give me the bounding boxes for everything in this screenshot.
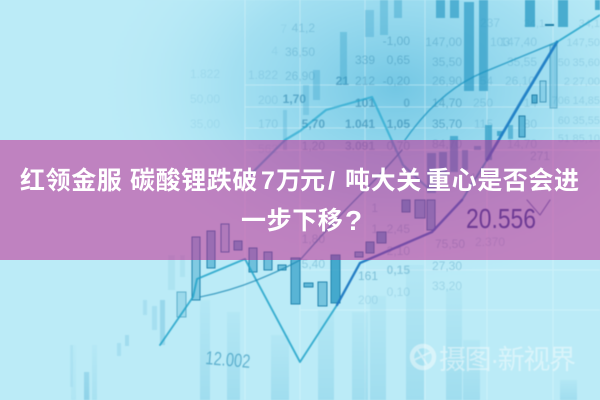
table of numbers: 26,10	[505, 74, 535, 88]
line: main rising trend	[160, 15, 600, 362]
table of numbers: 1.822	[248, 68, 278, 82]
table of numbers: 7	[280, 22, 287, 36]
table of numbers: -1,00	[383, 34, 410, 48]
table of numbers: 1.041	[345, 117, 375, 131]
title: 碳酸锂跌破	[130, 167, 258, 195]
large number 12.002: 12.002	[205, 348, 251, 373]
title: 红领金服	[20, 167, 122, 195]
title banner	[0, 140, 600, 260]
lower candlesticks	[70, 200, 435, 400]
table of numbers: 103	[490, 35, 510, 49]
table of numbers: 14,70	[432, 96, 462, 110]
title: 重心是否会进	[426, 167, 580, 195]
table of numbers: 1,05	[387, 117, 410, 131]
table of numbers: 75,50	[435, 237, 465, 251]
table of numbers: 35,55	[507, 55, 537, 69]
large number 20.556: 20.556	[466, 203, 536, 234]
faint volume bars	[71, 265, 577, 400]
table of numbers: 5,40	[302, 257, 325, 271]
table of numbers: 1	[371, 222, 378, 236]
title: 元	[300, 167, 326, 195]
table of numbers: 2	[564, 76, 570, 88]
title	[20, 167, 580, 236]
table of numbers: 10,80	[470, 171, 500, 185]
table of numbers: 147,40	[500, 35, 537, 49]
title: /	[328, 167, 336, 195]
table of numbers: 85,10	[572, 133, 600, 145]
table of numbers: 0	[403, 96, 410, 110]
table of numbers: 34,1	[524, 18, 545, 30]
table of numbers: 84,70	[432, 137, 462, 151]
table of numbers: 14,85	[572, 95, 600, 107]
table of numbers: 1,70	[283, 92, 306, 106]
table of numbers: 5	[433, 179, 440, 193]
table of numbers: 80	[524, 117, 537, 131]
table of numbers: 0,10	[387, 285, 410, 299]
table of numbers: 26,90	[285, 69, 315, 83]
table of numbers: 35,50	[432, 55, 462, 69]
table of numbers: 4	[271, 44, 278, 58]
table of numbers: 35,00	[190, 117, 220, 131]
table of numbers: 36,50	[285, 45, 315, 59]
table of numbers: 212	[355, 74, 375, 88]
table of numbers: 27,30	[432, 259, 462, 273]
watermark	[412, 345, 576, 375]
table of numbers: 101	[355, 96, 375, 110]
title: ?	[345, 205, 363, 236]
table of numbers: 2,45	[387, 222, 410, 236]
title: 万	[276, 167, 302, 195]
table of numbers: 14	[524, 96, 537, 110]
table of numbers: 14,70	[507, 137, 537, 151]
line: secondary curve	[200, 42, 557, 297]
table of numbers: 0,15	[387, 263, 410, 277]
table of numbers: 147,50	[566, 37, 600, 49]
table of numbers: 35,70	[432, 117, 462, 131]
table of numbers	[190, 16, 600, 307]
table of numbers: 115	[474, 117, 493, 131]
title: 7	[261, 167, 276, 195]
table of numbers: 237	[480, 16, 500, 30]
table of numbers: 339	[355, 53, 375, 67]
table of numbers: 1,20	[302, 139, 325, 153]
table of numbers: 0,65	[387, 53, 410, 67]
table of numbers: 200	[258, 93, 278, 107]
title: 一步下移	[241, 207, 343, 235]
table of numbers: 3.091	[345, 139, 375, 153]
title: 吨大关	[345, 167, 422, 195]
table of numbers: 26,90	[432, 74, 462, 88]
table of numbers: 161	[358, 269, 378, 283]
table of numbers: 50,00	[190, 92, 220, 106]
table of numbers: 1	[371, 201, 378, 215]
table of numbers: 706	[552, 95, 570, 107]
table of numbers: 271	[530, 149, 550, 163]
table of numbers: 34,1	[579, 18, 600, 30]
upper candlesticks	[283, 0, 600, 193]
table of numbers: 41,2	[292, 21, 315, 35]
table of numbers: 250	[473, 96, 493, 110]
table of numbers: 0,70	[387, 139, 410, 153]
table of numbers: 35,60	[572, 57, 600, 69]
table of numbers: 147,00	[425, 35, 462, 49]
table of numbers: 2.370	[475, 235, 505, 249]
table of numbers: 5,70	[302, 117, 325, 131]
table of numbers: 200	[358, 293, 378, 307]
table of numbers: 50	[558, 57, 570, 69]
icon: camera shutter logo	[412, 346, 434, 368]
table of numbers: 33,20	[432, 279, 462, 293]
table of numbers: 27,00	[572, 76, 600, 88]
table of numbers: 2,10	[387, 244, 410, 258]
table of numbers: 54	[480, 74, 493, 88]
table of numbers: 170	[258, 117, 278, 131]
table of numbers: -0,20	[383, 74, 410, 88]
table of numbers: 1.822	[190, 67, 220, 81]
table of numbers: 51	[558, 133, 570, 145]
table of numbers: 60	[558, 115, 570, 127]
table of numbers: 21	[336, 74, 349, 88]
table of numbers: 35,55	[572, 115, 600, 127]
watermark text: 摄图·新视界	[439, 345, 576, 375]
table of numbers: 1,80	[302, 232, 325, 246]
table of numbers: 562	[258, 142, 278, 156]
